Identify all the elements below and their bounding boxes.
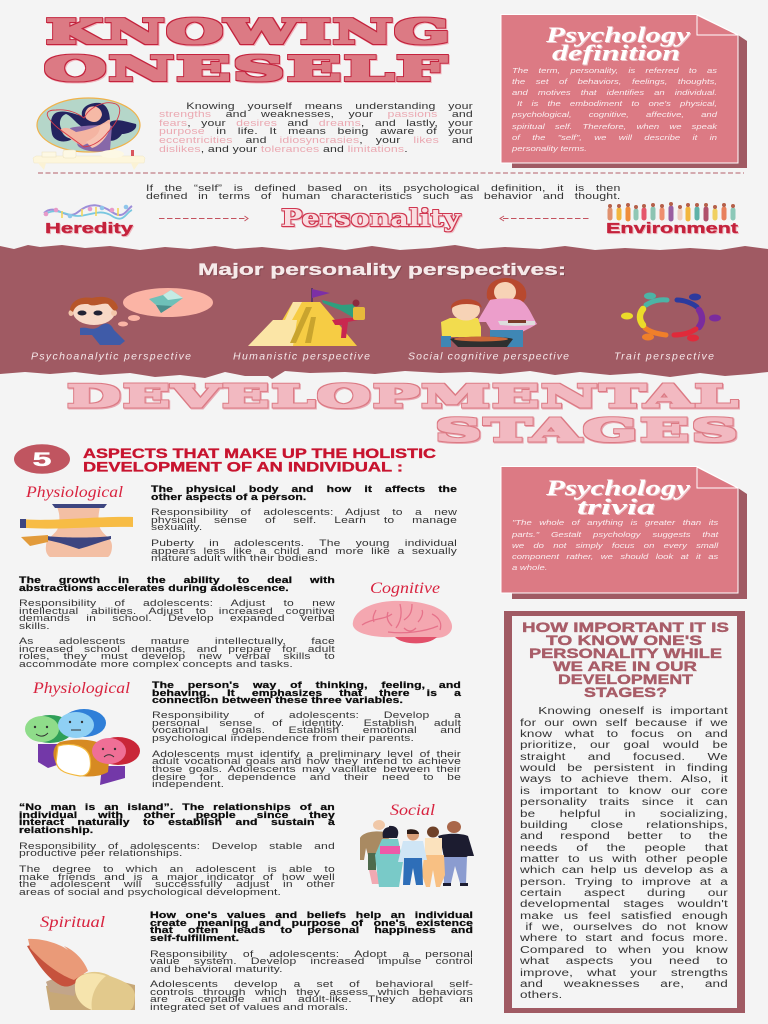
- text block: responsibility: [19, 600, 335, 631]
- text block: responsibility: sexuality.: [150, 522, 202, 532]
- text block: responsibility: demands in school. Develop expanded verbal: [19, 613, 335, 623]
- text block: spiritual bold intro: create meaning and purpose of one's existence: [150, 918, 473, 928]
- text block: responsibility: personal sense of identity. Establish adult: [152, 718, 461, 728]
- section: social aspect: [18, 800, 476, 898]
- heading: how important it is: HOW IMPORTANT IT IS: [522, 619, 729, 635]
- heading: how important it is: [504, 611, 745, 706]
- text block: responsibility: [19, 842, 335, 858]
- heading: psychology definition: Psychology: [545, 22, 690, 47]
- text block: physiological bold intro: [150, 484, 457, 502]
- icon: climber on yellow mountain: [248, 288, 365, 346]
- text block: importance explanation: certain aspect during our: [520, 888, 728, 899]
- torn paper band: [0, 245, 768, 379]
- text block: importance explanation: others.: [520, 990, 562, 1001]
- heading: psychology trivia: Psychology: [545, 475, 690, 500]
- text block: making friends: the adolescent will successfully adjust in other: [19, 879, 335, 889]
- text block: importance explanation: building close relationships,: [520, 820, 728, 831]
- text block: responsibility: [152, 712, 461, 743]
- text block: emotional bold intro: [152, 682, 461, 705]
- text block: preliminary goals: Adolescents must identify a preliminary level of their: [152, 748, 461, 758]
- text block: importance explanation: Compared to when you know: [520, 945, 728, 956]
- text block: definition of personality: personality terms.: [512, 144, 587, 153]
- text block: importance explanation: make us feel satisfied enough: [520, 911, 728, 922]
- text block: importance explanation: ways to achieve them. Also, it: [520, 774, 728, 785]
- text block: maturing adolescents: accommodate more complex concepts and tasks.: [19, 659, 293, 669]
- text block: importance explanation: which can help us develop as a: [520, 865, 728, 876]
- text block: responsibility: psychological independence from their parents.: [152, 733, 414, 743]
- text block: responsibility: Responsibility of adolescents: Develop a: [152, 710, 461, 720]
- perspective: psychoanalytic: [31, 288, 213, 362]
- text block: behavioral self-controls: controls through which they assess which behaviors: [150, 987, 473, 997]
- text block: knowing yourself intro: fears, your desires and dreams, and lastly, your: [159, 118, 473, 129]
- text block: responsibility: intellectual abilities. Adjust to increased cognitive: [19, 606, 335, 616]
- icon: emoji speech bubbles: [22, 708, 142, 786]
- text block: knowing yourself intro: purpose in life. It means being aware of your: [159, 126, 473, 137]
- panel: importance of knowing personality: [504, 611, 745, 1013]
- label: Cognitive: Cognitive: [370, 580, 440, 597]
- label: Heredity: Heredity: [45, 221, 133, 237]
- panel: psychology trivia card: [501, 466, 748, 600]
- heading: aspects of holistic development: DEVELOPMENT OF AN INDIVIDUAL :: [83, 460, 403, 474]
- text block: behavioral self-controls: are acceptable and adult-like. They adopt an: [150, 994, 473, 1004]
- heading: Developmental Stages: DEVELOPMENTAL: [67, 378, 740, 413]
- text block: knowing yourself intro: eccentricities and idiosyncrasies, your likes and: [159, 135, 473, 146]
- heading: Developmental Stages: STAGES: [435, 412, 740, 447]
- text block: preliminary goals: those goals. Adolescents may vacillate between their: [152, 764, 461, 774]
- perspective: trait: [614, 292, 721, 362]
- text block: responsibility: Responsibility of adolescents: Adjust to new: [19, 598, 335, 608]
- heading: how important it is: PERSONALITY WHILE: [529, 645, 722, 661]
- icon: mother and son cooking: [441, 278, 537, 347]
- text block: importance explanation: what aspects you need to: [520, 956, 728, 967]
- text block: importance explanation: for our own self because if we: [520, 718, 728, 729]
- panel: psychology definition card: [500, 14, 747, 168]
- text block: importance explanation: where to start and focus more.: [520, 933, 728, 944]
- text block: cognitive bold intro: abstractions accelerates during adolescence.: [19, 583, 289, 593]
- text block: making friends: [19, 866, 335, 897]
- text block: self definition: If the “self” is defined based on its psychological definition, it is then: [146, 183, 620, 194]
- arrow: heredity to personality: [159, 216, 249, 222]
- heading: how important it is: WE ARE IN OUR: [553, 658, 697, 674]
- heading: aspects of holistic development: ASPECTS THAT MAKE UP THE HOLISTIC: [83, 446, 436, 461]
- text block: behavioral self-controls: [150, 981, 473, 1012]
- text block: responsibility: Responsibility of adolescents: Develop stable and: [19, 840, 335, 850]
- icon: waist with measuring tape: [20, 504, 133, 557]
- text block: emotional bold intro: The person's way of thinking, feeling, and: [152, 680, 461, 690]
- text block: behavioral self-controls: Adolescents develop a set of behavioral self-: [150, 979, 473, 989]
- text block: spiritual bold intro: that often leads to personal happiness and: [150, 925, 473, 935]
- text block: preliminary goals: adult vocational goals and how they intend to achieve: [152, 756, 461, 766]
- text block: cognitive bold intro: [19, 577, 335, 592]
- text block: gestalt trivia: parts." Gestalt psychology suggests that: [512, 530, 718, 539]
- badge: number 5: [14, 444, 70, 474]
- title: Knowing Oneself: [44, 12, 452, 88]
- text block: responsibility: [150, 950, 473, 974]
- text block: importance explanation: personality traits since it can: [520, 797, 728, 808]
- text block: importance explanation: person. Trying to improve at a: [520, 877, 728, 888]
- text block: responsibility: vocational goals. Establish emotional and: [152, 725, 461, 735]
- text block: spiritual bold intro: self-fulfillment.: [150, 933, 239, 943]
- text block: preliminary goals: independent.: [152, 779, 224, 789]
- text block: importance explanation: Knowing oneself is important: [538, 706, 728, 717]
- label: Physiological: Physiological: [25, 484, 123, 501]
- text block: puberty: Puberty in adolescents. The young individual: [150, 538, 457, 548]
- text block: maturing adolescents: [19, 638, 335, 669]
- text block: importance explanation: prioritize, our goal would be: [520, 740, 728, 751]
- icon: group of five people: [360, 820, 494, 890]
- heading: major personality perspectives: Major personality perspectives:: [198, 261, 566, 279]
- text block: definition of personality: of the "self", we will describe it in: [512, 133, 717, 142]
- label: Humanistic perspective: [233, 350, 370, 362]
- perspective: humanistic: [233, 288, 370, 362]
- text block: responsibility: value system. Develop increased impulse control: [150, 956, 473, 966]
- heading: Developmental Stages: [67, 378, 740, 447]
- heading: aspects of holistic development: [83, 446, 436, 474]
- arrow: environment to personality: [499, 216, 588, 222]
- text block: importance explanation: straight and focused. We: [520, 752, 728, 763]
- text block: definition of personality: and motives that identifies an individual.: [512, 88, 717, 97]
- text block: emotional bold intro: behaving. It emphasizes that there is a: [152, 688, 461, 698]
- text block: responsibility: skills.: [19, 621, 50, 631]
- title: Knowing Oneself: ONESELF: [44, 49, 449, 88]
- text block: importance explanation: be helpful in socializing,: [520, 809, 728, 820]
- card shape with folded corner: [501, 466, 748, 600]
- text block: importance explanation: would be persistent in finding: [520, 763, 728, 774]
- text block: responsibility: physical sense of self. Learn to manage: [150, 515, 457, 525]
- text block: social bold intro: [19, 804, 335, 835]
- text block: knowing yourself intro: Knowing yourself means understanding your: [186, 101, 473, 112]
- text block: maturing adolescents: As adolescents mature intellectually, face: [19, 636, 335, 646]
- text block: definition of personality: the set of behaviors, feelings, thoughts,: [512, 77, 717, 86]
- text block: responsibility: Responsibility of adolescents: Adopt a personal: [150, 948, 473, 958]
- text block: definition of personality: The term, personality, is referred to as: [512, 66, 717, 74]
- text block: definition of personality: psychological, cognitive, affective, and: [512, 110, 717, 119]
- heading: how important it is: STAGES?: [584, 684, 667, 700]
- text block: gestalt trivia: [512, 517, 718, 573]
- heading: how important it is: DEVELOPMENT: [558, 671, 694, 687]
- icon: praying hands: [25, 937, 137, 1011]
- text block: emotional bold intro: connection between these three variables.: [152, 695, 403, 705]
- text block: definition of personality: It is the embodiment to one's physical,: [517, 99, 717, 108]
- label: Trait perspective: [614, 350, 714, 362]
- text block: cognitive bold intro: The growth in the ability to deal with: [19, 575, 335, 585]
- text block: gestalt trivia: component rather, we should look at it as: [512, 552, 718, 561]
- icon: crowd of people: [608, 202, 736, 222]
- text block: spiritual bold intro: How one's values and beliefs help an individual: [150, 910, 473, 920]
- icon: thinking boy with iceberg: [68, 288, 213, 345]
- label: Spiritual: Spiritual: [40, 914, 105, 931]
- text block: importance explanation: and weaknesses are, and: [520, 979, 728, 990]
- text block: maturing adolescents: increased school demands, and prepare for adult: [19, 644, 335, 654]
- text block: responsibility: [150, 507, 457, 532]
- text block: knowing yourself intro: strengths and weaknesses, your passions and: [159, 109, 473, 120]
- text block: gestalt trivia: a whole.: [512, 563, 547, 572]
- badge: number 5: 5: [32, 450, 52, 471]
- text block: importance explanation: is important to know our core: [520, 786, 728, 797]
- panel: major personality perspectives band: [0, 245, 768, 379]
- icon: woman hugging herself in a circle above a shelf: [32, 97, 146, 170]
- heading: psychology definition: [545, 22, 691, 66]
- text block: social bold intro: relationship.: [19, 825, 93, 835]
- text block: gestalt trivia: we do not simply focus on every small: [512, 541, 718, 550]
- text block: puberty: [150, 538, 457, 563]
- text block: puberty: mature adult with their bodies.: [150, 553, 318, 563]
- label: Psychoanalytic perspective: [31, 350, 191, 362]
- text block: responsibility: Responsibility of adolescents: Adjust to a new: [150, 507, 457, 517]
- section: physiological aspect: [20, 484, 457, 563]
- text block: maturing adolescents: roles, they must develop new verbal skills to: [19, 651, 335, 661]
- label: Physiological: Physiological: [32, 680, 130, 697]
- perspective: social cognitive: [408, 278, 569, 362]
- text block: social bold intro: “No man is an island”. The relationships of an: [19, 802, 335, 812]
- text block: making friends: The degree to which an adolescent is able to: [19, 864, 335, 874]
- text block: spiritual bold intro: [150, 912, 473, 943]
- section: spiritual aspect: [25, 908, 475, 1014]
- text block: importance explanation: [520, 706, 728, 1002]
- text block: knowing yourself intro: [159, 101, 473, 155]
- label: Social: Social: [390, 802, 435, 819]
- text block: making friends: make friends and is a major indicator of how well: [19, 872, 335, 882]
- text block: self definition: [146, 183, 620, 202]
- text block: physiological bold intro: other aspects of a person.: [150, 492, 306, 502]
- text block: gestalt trivia: "The whole of anything is greater than its: [512, 518, 718, 527]
- text block: importance explanation: matter to us with other people: [520, 854, 728, 865]
- icon: DNA strand: [43, 204, 132, 220]
- text block: importance explanation: and respond better to the: [520, 831, 728, 842]
- text block: responsibility: productive peer relationships.: [19, 848, 183, 858]
- icon: ring of colourful figures: [621, 292, 721, 342]
- text block: importance explanation: know what to focus on and: [520, 729, 728, 740]
- text block: importance explanation: developmental stages wouldn't: [520, 899, 728, 910]
- text block: puberty: appears less like a child and more like a sexually: [150, 546, 457, 556]
- text block: preliminary goals: desire for dependence and their need to be: [152, 772, 461, 782]
- section: cognitive aspect: [18, 575, 452, 669]
- title: Knowing Oneself: KNOWING: [46, 12, 452, 51]
- section: emotional aspect: [22, 680, 462, 790]
- text block: self definition: defined in terms of human characteristics such as behavior and thought.: [146, 191, 620, 202]
- text block: making friends: areas of social and psychological development.: [19, 887, 281, 897]
- text block: definition of personality: [512, 66, 718, 153]
- text block: preliminary goals: [152, 750, 461, 789]
- text block: social bold intro: interact naturally to establish and sustain a: [19, 817, 335, 827]
- heading: how important it is: TO KNOW ONE'S: [546, 632, 702, 648]
- text block: social bold intro: individual with other people since they: [19, 810, 335, 820]
- label: Personality: Personality: [281, 205, 461, 232]
- text block: importance explanation: improve, what your strengths: [520, 968, 728, 979]
- icon: brain: [352, 601, 456, 647]
- heading: psychology trivia: trivia: [577, 494, 655, 519]
- text block: importance explanation: if we, ourselves do not know: [525, 922, 728, 933]
- heading: psychology definition: definition: [552, 40, 680, 65]
- card shape with folded corner: [500, 14, 747, 168]
- text block: importance explanation: needs of the people that: [520, 843, 728, 854]
- text block: responsibility: and behavioral maturity.: [150, 964, 283, 974]
- label: Social cognitive perspective: [408, 350, 569, 362]
- label: Environment: Environment: [606, 221, 738, 237]
- text block: behavioral self-controls: integrated set of values and morals.: [150, 1002, 348, 1012]
- heading: psychology trivia: [541, 475, 701, 523]
- text block: knowing yourself intro: dislikes, and your tolerances and limitations.: [159, 144, 408, 155]
- text block: definition of personality: spiritual self. Therefore, when we speak: [512, 122, 717, 131]
- text block: physiological bold intro: The physical body and how it affects the: [150, 484, 457, 494]
